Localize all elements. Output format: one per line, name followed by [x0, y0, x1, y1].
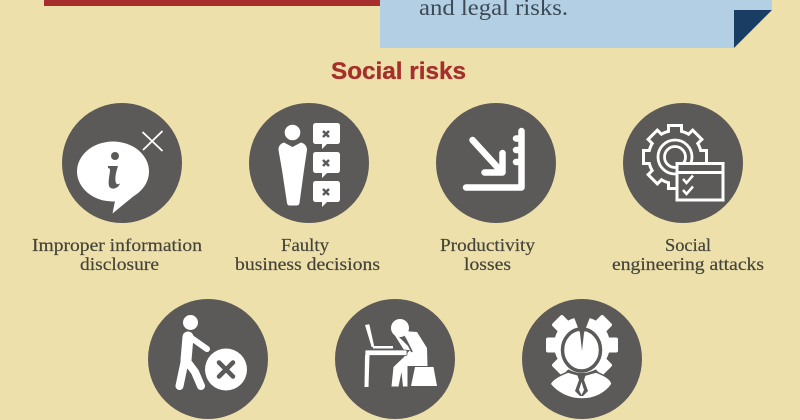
label: Faulty [281, 235, 329, 255]
label: losses [464, 254, 511, 274]
label [612, 235, 764, 274]
label: Improper information [32, 235, 202, 255]
icon: shoulders and tie [550, 372, 612, 399]
item: frustrated person at laptop [335, 299, 455, 419]
item: social engineering attacks [612, 103, 764, 274]
label: business decisions [235, 254, 380, 274]
icon: checklist window [677, 164, 723, 200]
icon: cross mark [142, 131, 162, 151]
icon: head silhouette [562, 312, 600, 371]
item: faulty business decisions [235, 103, 380, 274]
item: person pushing cross ball [148, 299, 268, 419]
icon: gear [546, 314, 618, 376]
label: engineering attacks [612, 254, 764, 274]
red banner bar [44, 0, 380, 6]
label [440, 235, 535, 274]
item: productivity losses [436, 103, 556, 274]
label: Productivity [440, 235, 535, 255]
icon: seated figure head in hands [391, 319, 437, 386]
icon: falling chart arrow [466, 131, 522, 188]
icon: laptop desk [364, 324, 407, 387]
label: disclosure [80, 254, 159, 274]
icon: person [278, 125, 307, 206]
icon: speech bubbles with crosses [313, 123, 340, 207]
icon: gear outline [642, 124, 708, 190]
item: business person with gear head [522, 299, 642, 419]
label: Social [665, 235, 711, 255]
icon: info speech bubble [77, 142, 149, 214]
section heading: Social risks [331, 58, 466, 85]
label [235, 235, 380, 274]
icon: pushing figure [180, 315, 207, 386]
ribbon fold [734, 10, 772, 48]
label [32, 235, 202, 274]
icon: cross ball [205, 348, 247, 390]
item: improper information disclosure [32, 103, 202, 274]
blue callout ribbon [380, 0, 772, 48]
